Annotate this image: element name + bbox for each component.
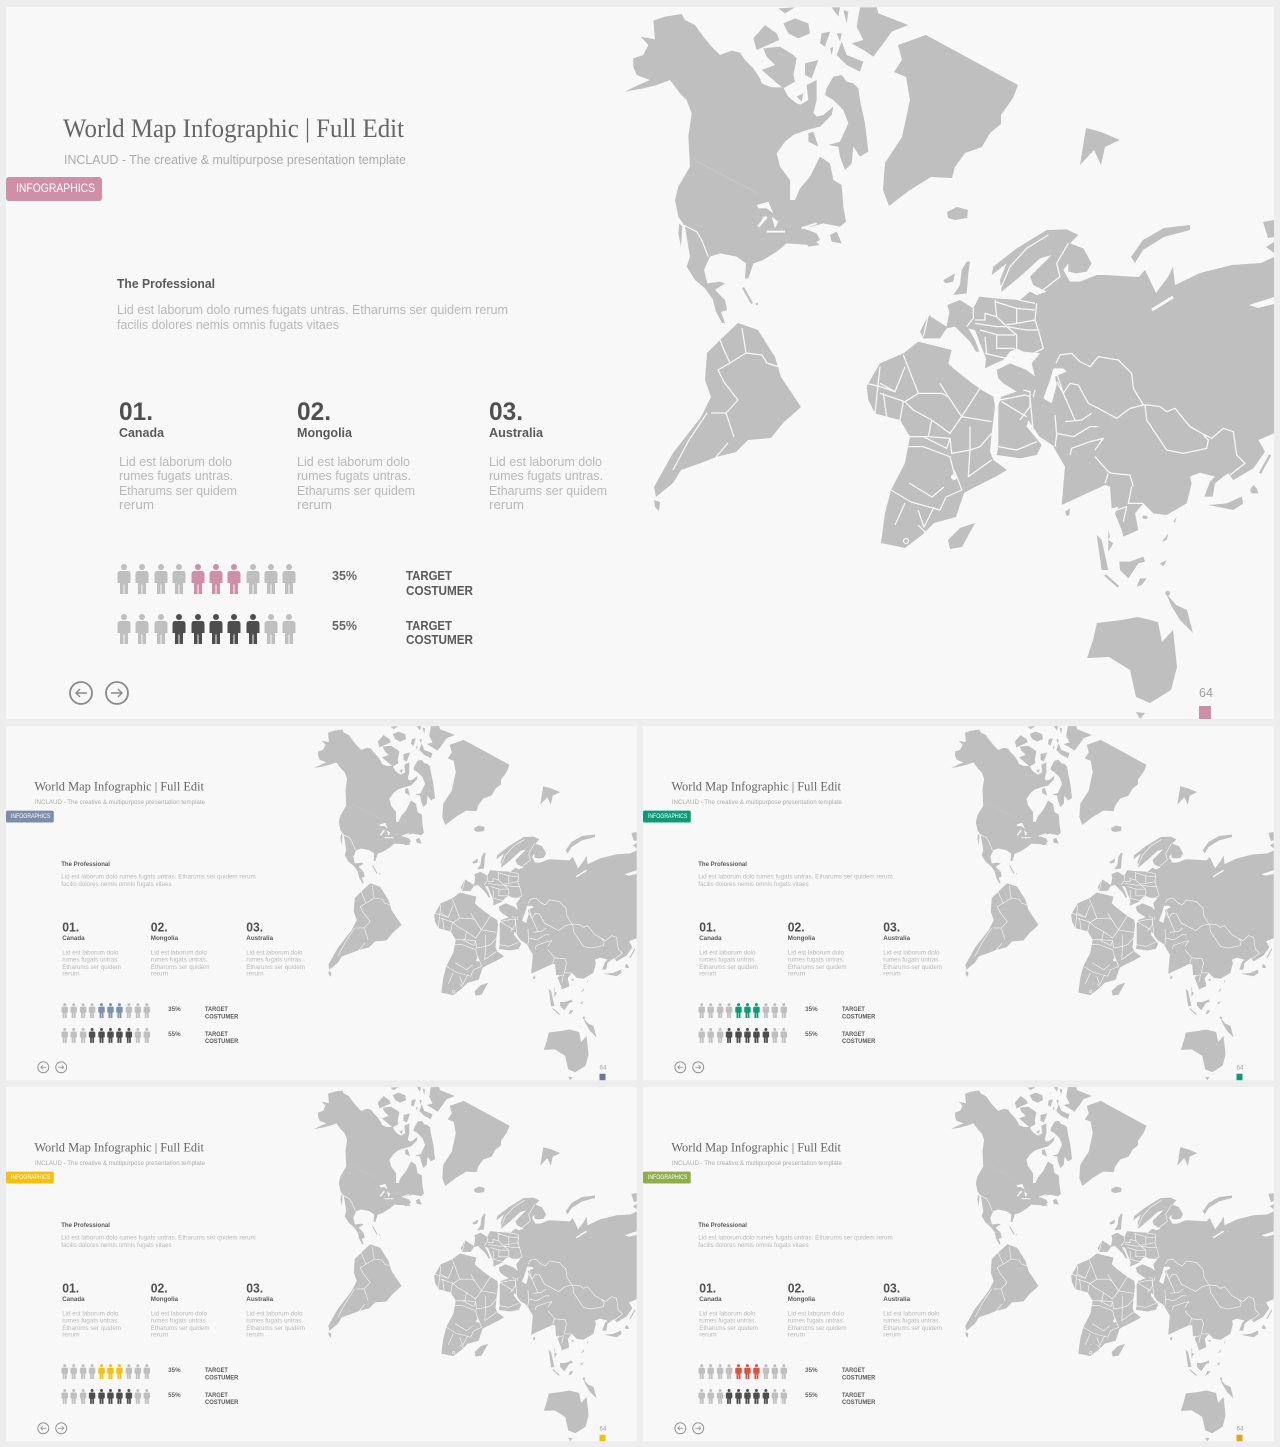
- column 01 Canada: Etharums ser quidem: [62, 964, 121, 971]
- stat 55%: COSTUMER: [205, 1399, 239, 1406]
- panel: slide variant blue: [6, 726, 637, 1080]
- column 01 Canada: Etharums ser quidem: [62, 1325, 121, 1332]
- badge: INFOGRAPHICS: [11, 814, 50, 820]
- stat 55%: COSTUMER: [842, 1038, 876, 1045]
- stat 35%: [168, 1367, 239, 1382]
- column 03 Australia: [489, 398, 607, 512]
- text block: The Professional: The Professional: [698, 861, 747, 868]
- column 03 Australia: rerum: [489, 497, 524, 512]
- badge: [643, 811, 691, 823]
- badge: [6, 1172, 54, 1184]
- subtitle: INCLAUD - The creative & multipurpose presentation template: [64, 152, 406, 167]
- people chart 55%: [698, 1028, 787, 1043]
- column 03 Australia: Lid est laborum dolo: [489, 454, 602, 469]
- column 03 Australia: Lid est laborum dolo: [883, 949, 940, 956]
- text block: The Professional: facilis dolores nemis omnis fugats vitaes: [61, 1242, 172, 1249]
- world map: [314, 1087, 637, 1441]
- badge: [643, 1172, 691, 1184]
- stat 55%: [168, 1031, 239, 1045]
- people chart 55%: [61, 1028, 150, 1043]
- stat 35%: TARGET: [205, 1367, 228, 1374]
- page number: [1199, 685, 1213, 719]
- column 01 Canada: 01.: [62, 920, 79, 934]
- column 03 Australia: Etharums ser quidem: [246, 1325, 305, 1332]
- panel: slide variant yellow: [6, 1087, 637, 1441]
- badge: INFOGRAPHICS: [11, 1175, 50, 1181]
- stat 55%: TARGET: [205, 1392, 228, 1399]
- icon: back arrow: [70, 682, 92, 704]
- icon: forward arrow: [56, 1423, 67, 1434]
- column 02 Mongolia: Mongolia: [297, 425, 353, 440]
- stat 35%: [332, 568, 474, 598]
- column 01 Canada: Etharums ser quidem: [699, 964, 758, 971]
- column 03 Australia: 03.: [883, 1281, 900, 1295]
- icon: forward arrow: [56, 1062, 67, 1073]
- people chart 35%: [61, 1364, 150, 1379]
- column 02 Mongolia: rerum: [788, 971, 805, 978]
- column 01 Canada: 01.: [699, 920, 716, 934]
- column 02 Mongolia: rumes fugats untras.: [788, 956, 845, 963]
- stat 55%: TARGET: [842, 1031, 865, 1038]
- page number: [600, 1064, 607, 1080]
- column 02 Mongolia: Lid est laborum dolo: [788, 949, 844, 956]
- column 02 Mongolia: Mongolia: [788, 935, 816, 942]
- people chart 35%: [698, 1003, 787, 1018]
- column 01 Canada: Canada: [699, 935, 722, 942]
- world map: [951, 726, 1274, 1080]
- column 03 Australia: [883, 920, 942, 978]
- column 02 Mongolia: rerum: [151, 1332, 168, 1339]
- column 03 Australia: Etharums ser quidem: [883, 964, 942, 971]
- column 01 Canada: rerum: [699, 1332, 717, 1339]
- people chart 55%: [61, 1389, 150, 1404]
- stat 35%: COSTUMER: [842, 1375, 876, 1382]
- column 03 Australia: Etharums ser quidem: [246, 964, 305, 971]
- text block: The Professional: facilis dolores nemis omnis fugats vitaes: [117, 317, 339, 332]
- column 02 Mongolia: [788, 1281, 846, 1339]
- column 01 Canada: Canada: [119, 425, 165, 440]
- column 02 Mongolia: Mongolia: [151, 1296, 179, 1303]
- stat 55%: 55%: [332, 618, 357, 633]
- stat 55%: [332, 618, 474, 647]
- column 03 Australia: 03.: [489, 398, 523, 426]
- stat 55%: [168, 1392, 239, 1406]
- text block: The Professional: facilis dolores nemis omnis fugats vitaes: [61, 881, 172, 888]
- stat 35%: TARGET: [842, 1006, 865, 1013]
- column 03 Australia: rerum: [883, 1332, 901, 1339]
- column 03 Australia: Australia: [246, 935, 274, 942]
- column 03 Australia: Australia: [883, 1296, 911, 1303]
- people chart 55%: [118, 614, 296, 644]
- column 03 Australia: rumes fugats untras.: [489, 468, 603, 483]
- panel: slide variant green: [643, 726, 1274, 1080]
- stat 35%: COSTUMER: [406, 583, 474, 598]
- column 03 Australia: rerum: [246, 971, 264, 978]
- column 01 Canada: Etharums ser quidem: [119, 483, 237, 498]
- stat 55%: 55%: [168, 1392, 181, 1399]
- column 01 Canada: [119, 398, 237, 512]
- column 02 Mongolia: [297, 398, 415, 512]
- panel: main slide (pink): [6, 7, 1274, 719]
- stat 55%: 55%: [805, 1392, 818, 1399]
- stat 55%: 55%: [168, 1031, 181, 1038]
- column 01 Canada: [699, 920, 758, 978]
- text block: The Professional: Lid est laborum dolo rumes fugats untras. Etharums ser quidem rerum: [61, 874, 256, 881]
- column 01 Canada: 01.: [699, 1281, 716, 1295]
- column 02 Mongolia: Lid est laborum dolo: [297, 454, 410, 469]
- people chart 35%: [118, 564, 296, 594]
- column 03 Australia: rerum: [883, 971, 901, 978]
- text block: The Professional: Lid est laborum dolo rumes fugats untras. Etharums ser quidem rerum: [698, 1235, 893, 1242]
- subtitle: INCLAUD - The creative & multipurpose presentation template: [35, 1160, 205, 1167]
- column 02 Mongolia: rumes fugats untras.: [151, 956, 208, 963]
- column 03 Australia: rerum: [246, 1332, 264, 1339]
- text block: The Professional: Lid est laborum dolo rumes fugats untras. Etharums ser quidem rerum: [698, 874, 893, 881]
- stat 35%: 35%: [805, 1006, 818, 1013]
- stat 35%: [805, 1006, 876, 1021]
- column 02 Mongolia: Lid est laborum dolo: [788, 1310, 844, 1317]
- stat 35%: COSTUMER: [205, 1014, 239, 1021]
- badge: [6, 177, 102, 201]
- column 02 Mongolia: Mongolia: [788, 1296, 816, 1303]
- column 03 Australia: Australia: [883, 935, 911, 942]
- column 02 Mongolia: rerum: [151, 971, 168, 978]
- column 03 Australia: 03.: [883, 920, 900, 934]
- column 03 Australia: Lid est laborum dolo: [883, 1310, 940, 1317]
- column 03 Australia: [883, 1281, 942, 1339]
- stat 55%: [805, 1031, 876, 1045]
- column 01 Canada: Etharums ser quidem: [699, 1325, 758, 1332]
- column 02 Mongolia: Etharums ser quidem: [151, 964, 209, 971]
- badge: INFOGRAPHICS: [16, 181, 95, 195]
- stat 35%: [168, 1006, 239, 1021]
- people chart 35%: [61, 1003, 150, 1018]
- column 02 Mongolia: [151, 920, 209, 978]
- stat 55%: [805, 1392, 876, 1406]
- column 02 Mongolia: Etharums ser quidem: [788, 1325, 846, 1332]
- column 02 Mongolia: Etharums ser quidem: [788, 964, 846, 971]
- column 02 Mongolia: 02.: [788, 1281, 805, 1295]
- column 01 Canada: Canada: [62, 935, 85, 942]
- page number: 64: [1237, 1425, 1244, 1432]
- people chart 55%: [698, 1389, 787, 1404]
- column 02 Mongolia: [151, 1281, 209, 1339]
- people chart 35%: [698, 1364, 787, 1379]
- column 02 Mongolia: Mongolia: [151, 935, 179, 942]
- column 02 Mongolia: 02.: [297, 398, 331, 426]
- text block: The Professional: facilis dolores nemis omnis fugats vitaes: [698, 1242, 809, 1249]
- page number: [1237, 1064, 1244, 1080]
- title: World Map Infographic | Full Edit: [671, 1140, 841, 1155]
- column 02 Mongolia: rerum: [297, 497, 332, 512]
- title: World Map Infographic | Full Edit: [34, 1140, 204, 1155]
- column 01 Canada: rerum: [62, 1332, 80, 1339]
- column 03 Australia: [246, 920, 305, 978]
- text block: The Professional: [698, 861, 893, 888]
- stat 55%: TARGET: [205, 1031, 228, 1038]
- stat 35%: TARGET: [842, 1367, 865, 1374]
- stat 35%: COSTUMER: [205, 1375, 239, 1382]
- panel: slide variant red and olive: [643, 1087, 1274, 1441]
- subtitle: INCLAUD - The creative & multipurpose presentation template: [672, 799, 842, 806]
- column 01 Canada: [62, 1281, 121, 1339]
- column 02 Mongolia: rerum: [788, 1332, 805, 1339]
- column 02 Mongolia: rumes fugats untras.: [151, 1317, 208, 1324]
- column 01 Canada: 01.: [119, 398, 153, 426]
- column 02 Mongolia: 02.: [788, 920, 805, 934]
- column 01 Canada: Lid est laborum dolo: [62, 949, 119, 956]
- column 03 Australia: Australia: [246, 1296, 274, 1303]
- column 03 Australia: Etharums ser quidem: [883, 1325, 942, 1332]
- text block: The Professional: The Professional: [61, 1222, 110, 1229]
- badge: [6, 811, 54, 823]
- world map: [625, 7, 1274, 719]
- title: World Map Infographic | Full Edit: [671, 779, 841, 794]
- world map: [314, 726, 637, 1080]
- stat 35%: TARGET: [406, 568, 452, 583]
- stat 35%: 35%: [805, 1367, 818, 1374]
- column 03 Australia: [246, 1281, 305, 1339]
- page number: 64: [600, 1064, 607, 1071]
- badge: INFOGRAPHICS: [648, 1175, 687, 1181]
- subtitle: INCLAUD - The creative & multipurpose presentation template: [672, 1160, 842, 1167]
- title: World Map Infographic | Full Edit: [63, 114, 405, 143]
- column 01 Canada: rumes fugats untras.: [119, 468, 233, 483]
- column 03 Australia: 03.: [246, 920, 263, 934]
- column 01 Canada: rumes fugats untras.: [62, 1317, 119, 1324]
- column 01 Canada: rumes fugats untras.: [62, 956, 119, 963]
- column 01 Canada: rerum: [62, 971, 80, 978]
- column 02 Mongolia: 02.: [151, 1281, 168, 1295]
- column 01 Canada: Lid est laborum dolo: [699, 1310, 756, 1317]
- column 01 Canada: rerum: [119, 497, 154, 512]
- column 01 Canada: Canada: [62, 1296, 85, 1303]
- column 01 Canada: rumes fugats untras.: [699, 1317, 756, 1324]
- badge: INFOGRAPHICS: [648, 814, 687, 820]
- icon: forward arrow: [106, 682, 128, 704]
- stat 35%: 35%: [168, 1006, 181, 1013]
- stat 55%: COSTUMER: [406, 632, 474, 647]
- text block: The Professional: [61, 1222, 256, 1249]
- text block: The Professional: [698, 1222, 893, 1249]
- column 02 Mongolia: rumes fugats untras.: [297, 468, 411, 483]
- stat 55%: TARGET: [842, 1392, 865, 1399]
- world map: [951, 1087, 1274, 1441]
- text block: The Professional: Lid est laborum dolo rumes fugats untras. Etharums ser quidem rerum: [61, 1235, 256, 1242]
- column 01 Canada: [699, 1281, 758, 1339]
- page number: 64: [1199, 685, 1213, 700]
- icon: back arrow: [38, 1423, 49, 1434]
- text block: The Professional: Lid est laborum dolo rumes fugats untras. Etharums ser quidem rerum: [117, 302, 508, 317]
- icon: back arrow: [675, 1423, 686, 1434]
- text block: The Professional: [61, 861, 256, 888]
- column 03 Australia: 03.: [246, 1281, 263, 1295]
- stat 35%: 35%: [168, 1367, 181, 1374]
- column 02 Mongolia: rumes fugats untras.: [788, 1317, 845, 1324]
- column 03 Australia: Etharums ser quidem: [489, 483, 607, 498]
- text block: The Professional: The Professional: [117, 276, 215, 291]
- stat 55%: TARGET: [406, 618, 452, 633]
- column 01 Canada: Canada: [699, 1296, 722, 1303]
- text block: The Professional: facilis dolores nemis omnis fugats vitaes: [698, 881, 809, 888]
- page number: [1237, 1425, 1244, 1441]
- column 01 Canada: rerum: [699, 971, 717, 978]
- icon: back arrow: [675, 1062, 686, 1073]
- column 03 Australia: rumes fugats untras.: [883, 1317, 940, 1324]
- column 03 Australia: Lid est laborum dolo: [246, 949, 303, 956]
- column 02 Mongolia: [788, 920, 846, 978]
- stat 35%: 35%: [332, 568, 357, 583]
- stat 55%: COSTUMER: [842, 1399, 876, 1406]
- title: World Map Infographic | Full Edit: [34, 779, 204, 794]
- page number: 64: [600, 1425, 607, 1432]
- subtitle: INCLAUD - The creative & multipurpose presentation template: [35, 799, 205, 806]
- icon: forward arrow: [693, 1062, 704, 1073]
- column 02 Mongolia: 02.: [151, 920, 168, 934]
- column 02 Mongolia: Etharums ser quidem: [151, 1325, 209, 1332]
- stat 35%: TARGET: [205, 1006, 228, 1013]
- column 02 Mongolia: Lid est laborum dolo: [151, 1310, 207, 1317]
- column 03 Australia: rumes fugats untras.: [246, 956, 303, 963]
- column 02 Mongolia: Etharums ser quidem: [297, 483, 415, 498]
- icon: forward arrow: [693, 1423, 704, 1434]
- column 01 Canada: Lid est laborum dolo: [62, 1310, 119, 1317]
- column 01 Canada: 01.: [62, 1281, 79, 1295]
- column 03 Australia: Lid est laborum dolo: [246, 1310, 303, 1317]
- stat 35%: [805, 1367, 876, 1382]
- page number: 64: [1237, 1064, 1244, 1071]
- icon: back arrow: [38, 1062, 49, 1073]
- column 03 Australia: rumes fugats untras.: [246, 1317, 303, 1324]
- stat 35%: COSTUMER: [842, 1014, 876, 1021]
- column 03 Australia: rumes fugats untras.: [883, 956, 940, 963]
- column 03 Australia: Australia: [489, 425, 544, 440]
- text block: The Professional: The Professional: [698, 1222, 747, 1229]
- column 02 Mongolia: Lid est laborum dolo: [151, 949, 207, 956]
- page number: [600, 1425, 607, 1441]
- text block: The Professional: [117, 276, 508, 332]
- stat 55%: 55%: [805, 1031, 818, 1038]
- stat 55%: COSTUMER: [205, 1038, 239, 1045]
- column 01 Canada: Lid est laborum dolo: [699, 949, 756, 956]
- column 01 Canada: [62, 920, 121, 978]
- column 01 Canada: Lid est laborum dolo: [119, 454, 232, 469]
- column 01 Canada: rumes fugats untras.: [699, 956, 756, 963]
- text block: The Professional: The Professional: [61, 861, 110, 868]
